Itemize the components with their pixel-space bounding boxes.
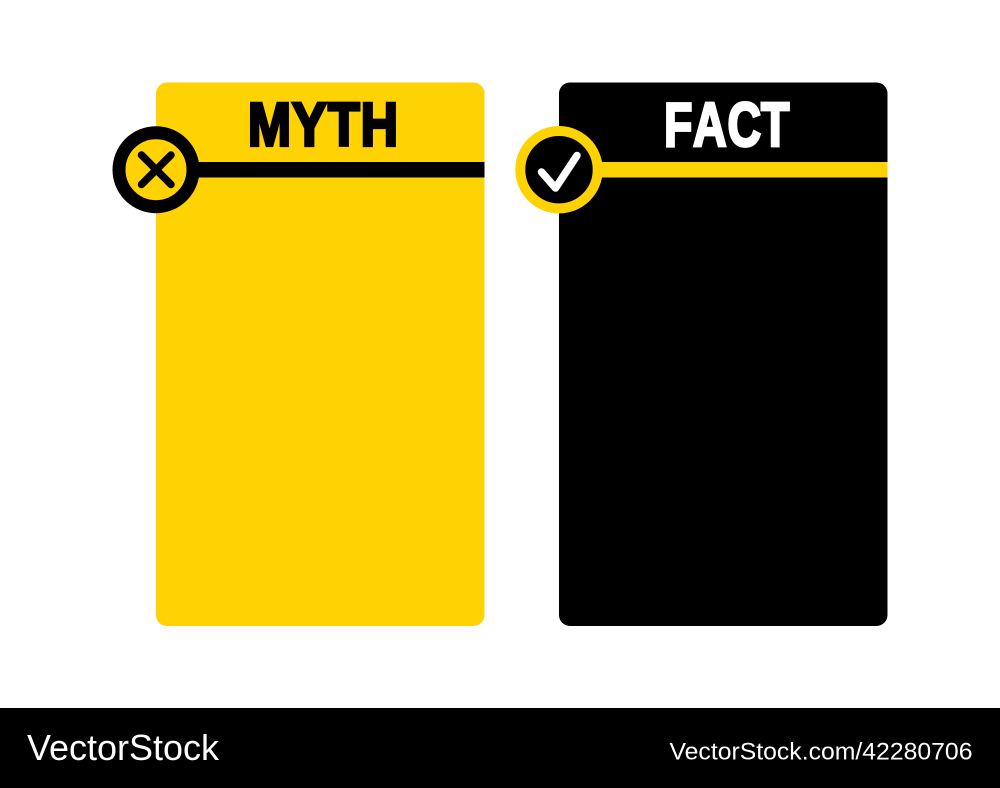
footer image id: VectorStock.com/42280706 <box>670 738 972 766</box>
panel: myth <box>119 82 484 626</box>
fact divider bar <box>595 162 888 178</box>
watermark footer band <box>0 708 1000 788</box>
fact heading: FACT <box>664 89 789 160</box>
icon: check in circle <box>520 131 598 208</box>
footer brand name: VectorStock <box>27 727 220 768</box>
icon: cross in circle <box>119 133 193 207</box>
panel: fact <box>520 82 888 626</box>
fact panel background <box>559 82 888 626</box>
myth divider bar <box>190 162 484 178</box>
myth panel background <box>156 82 484 626</box>
myth heading: MYTH <box>248 91 398 159</box>
